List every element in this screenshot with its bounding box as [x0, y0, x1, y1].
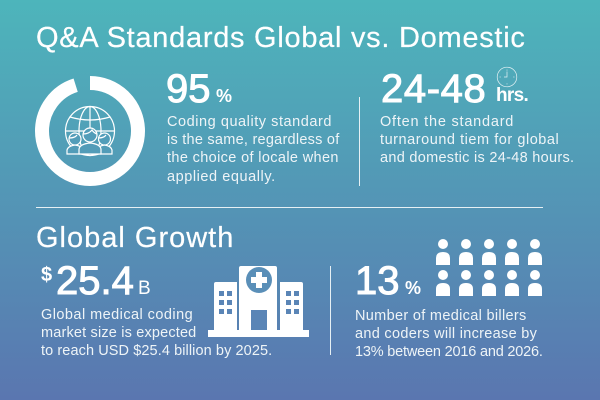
icon: globe and people — [66, 106, 114, 156]
text: coding quality standard: applied equally. — [167, 169, 276, 185]
stat: 24-48 hrs.: 24-48 — [381, 67, 486, 111]
chart: 95% donut ring with globe and people icon — [35, 76, 145, 186]
text: turnaround time — [380, 114, 574, 166]
text: turnaround time: turnaround tiem for global — [380, 132, 559, 148]
text: market size: to reach USD $25.4 billion by 2025. — [41, 343, 272, 359]
stat: 95% — [166, 67, 232, 111]
text: billers and coders: and coders will increase by — [355, 326, 537, 342]
stat: 13% — [355, 259, 421, 303]
text: coding quality standard: Coding quality standard — [167, 114, 332, 130]
section divider — [36, 207, 543, 208]
divider: bottom stats — [330, 266, 331, 355]
text: billers and coders: Number of medical billers — [355, 308, 527, 324]
icon: hospital — [208, 266, 309, 337]
divider: top stats — [359, 97, 360, 186]
stat: 95%: % — [216, 86, 232, 106]
text: billers and coders — [355, 308, 543, 360]
stat: 13%: 13 — [355, 259, 400, 303]
text: coding quality standard: the choice of locale when — [167, 150, 339, 166]
stat: 13%: % — [405, 278, 421, 298]
title: Q&A Standards Global vs. Domestic — [36, 22, 526, 54]
text: billers and coders: 13% between 2016 and 2026. — [355, 344, 543, 360]
text: market size: Global medical coding — [41, 307, 193, 323]
stat: $25.4 B: B — [138, 278, 151, 299]
heading: global growth: Global Growth — [36, 222, 234, 254]
stat: $25.4 B: 25.4 — [56, 259, 134, 303]
icon: people grid — [436, 239, 542, 296]
stat: 95%: 95 — [166, 67, 210, 111]
text: coding quality standard: is the same, regardless of — [167, 132, 340, 148]
icon: clock — [496, 66, 518, 88]
text: market size: market size is expected — [41, 325, 196, 341]
text: turnaround time: and domestic is 24-48 hours. — [380, 150, 574, 166]
text: market size — [41, 307, 272, 359]
stat: 24-48 hrs.: hrs. — [496, 85, 528, 106]
text: coding quality standard — [167, 114, 340, 185]
text: turnaround time: Often the standard — [380, 114, 514, 130]
stat: $25.4 B: $ — [41, 264, 52, 286]
